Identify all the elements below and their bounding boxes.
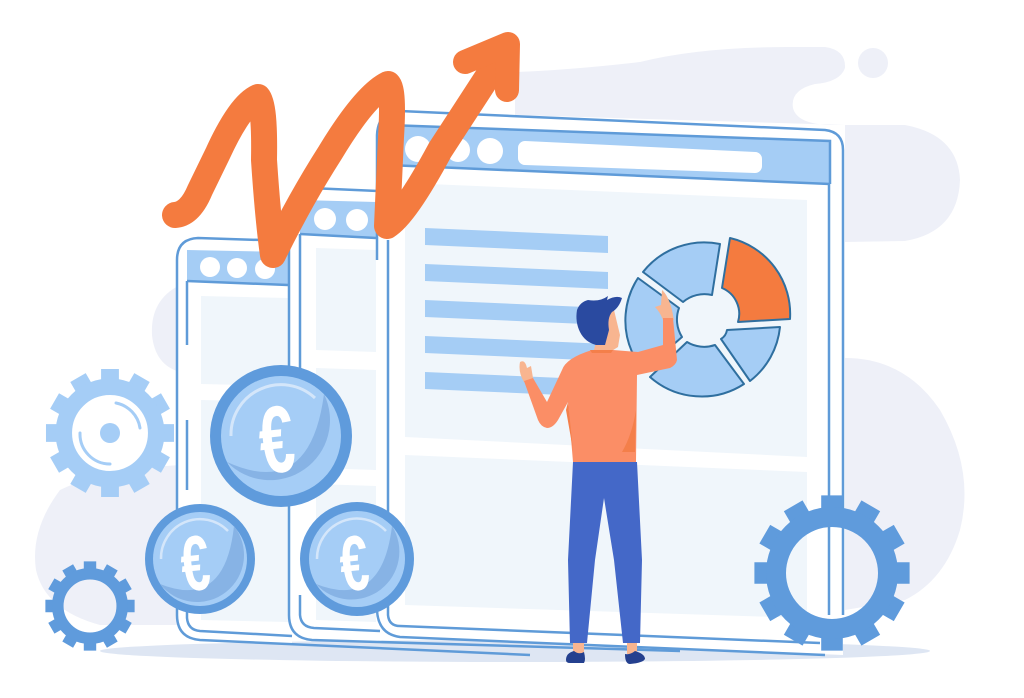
ground shadow: [100, 640, 930, 662]
hair: [576, 296, 622, 345]
coin: small euro right: [300, 502, 414, 616]
coin: small euro right: €: [335, 519, 373, 609]
lower content panel: [405, 455, 807, 618]
text bars: [425, 228, 608, 397]
neck and face: [594, 310, 620, 352]
shoes: [566, 651, 645, 664]
background blobs: [35, 47, 964, 625]
gear: small blue: [45, 561, 135, 651]
small browser window: [177, 238, 530, 655]
person: [520, 290, 677, 664]
right hand: [655, 290, 674, 320]
upper content panel: [405, 183, 807, 457]
ankles: [573, 643, 637, 654]
coin: large euro: €: [254, 386, 300, 495]
browser toolbar: [388, 125, 830, 184]
sweater shadow: [566, 350, 636, 452]
large browser window: [377, 111, 843, 655]
gear: pale with disc: [46, 369, 174, 497]
coin: large euro: [210, 365, 352, 507]
gear: large blue: [754, 495, 910, 651]
middle browser window: [289, 188, 680, 651]
coin: small euro left: €: [176, 519, 214, 609]
pie chart: [625, 238, 790, 397]
growth arrow: [175, 44, 508, 255]
left hand: [520, 361, 533, 384]
sweater: [524, 318, 677, 462]
trousers: [568, 462, 642, 643]
coin: small euro left: [145, 504, 255, 614]
pie slice: orange highlight: [722, 238, 790, 322]
